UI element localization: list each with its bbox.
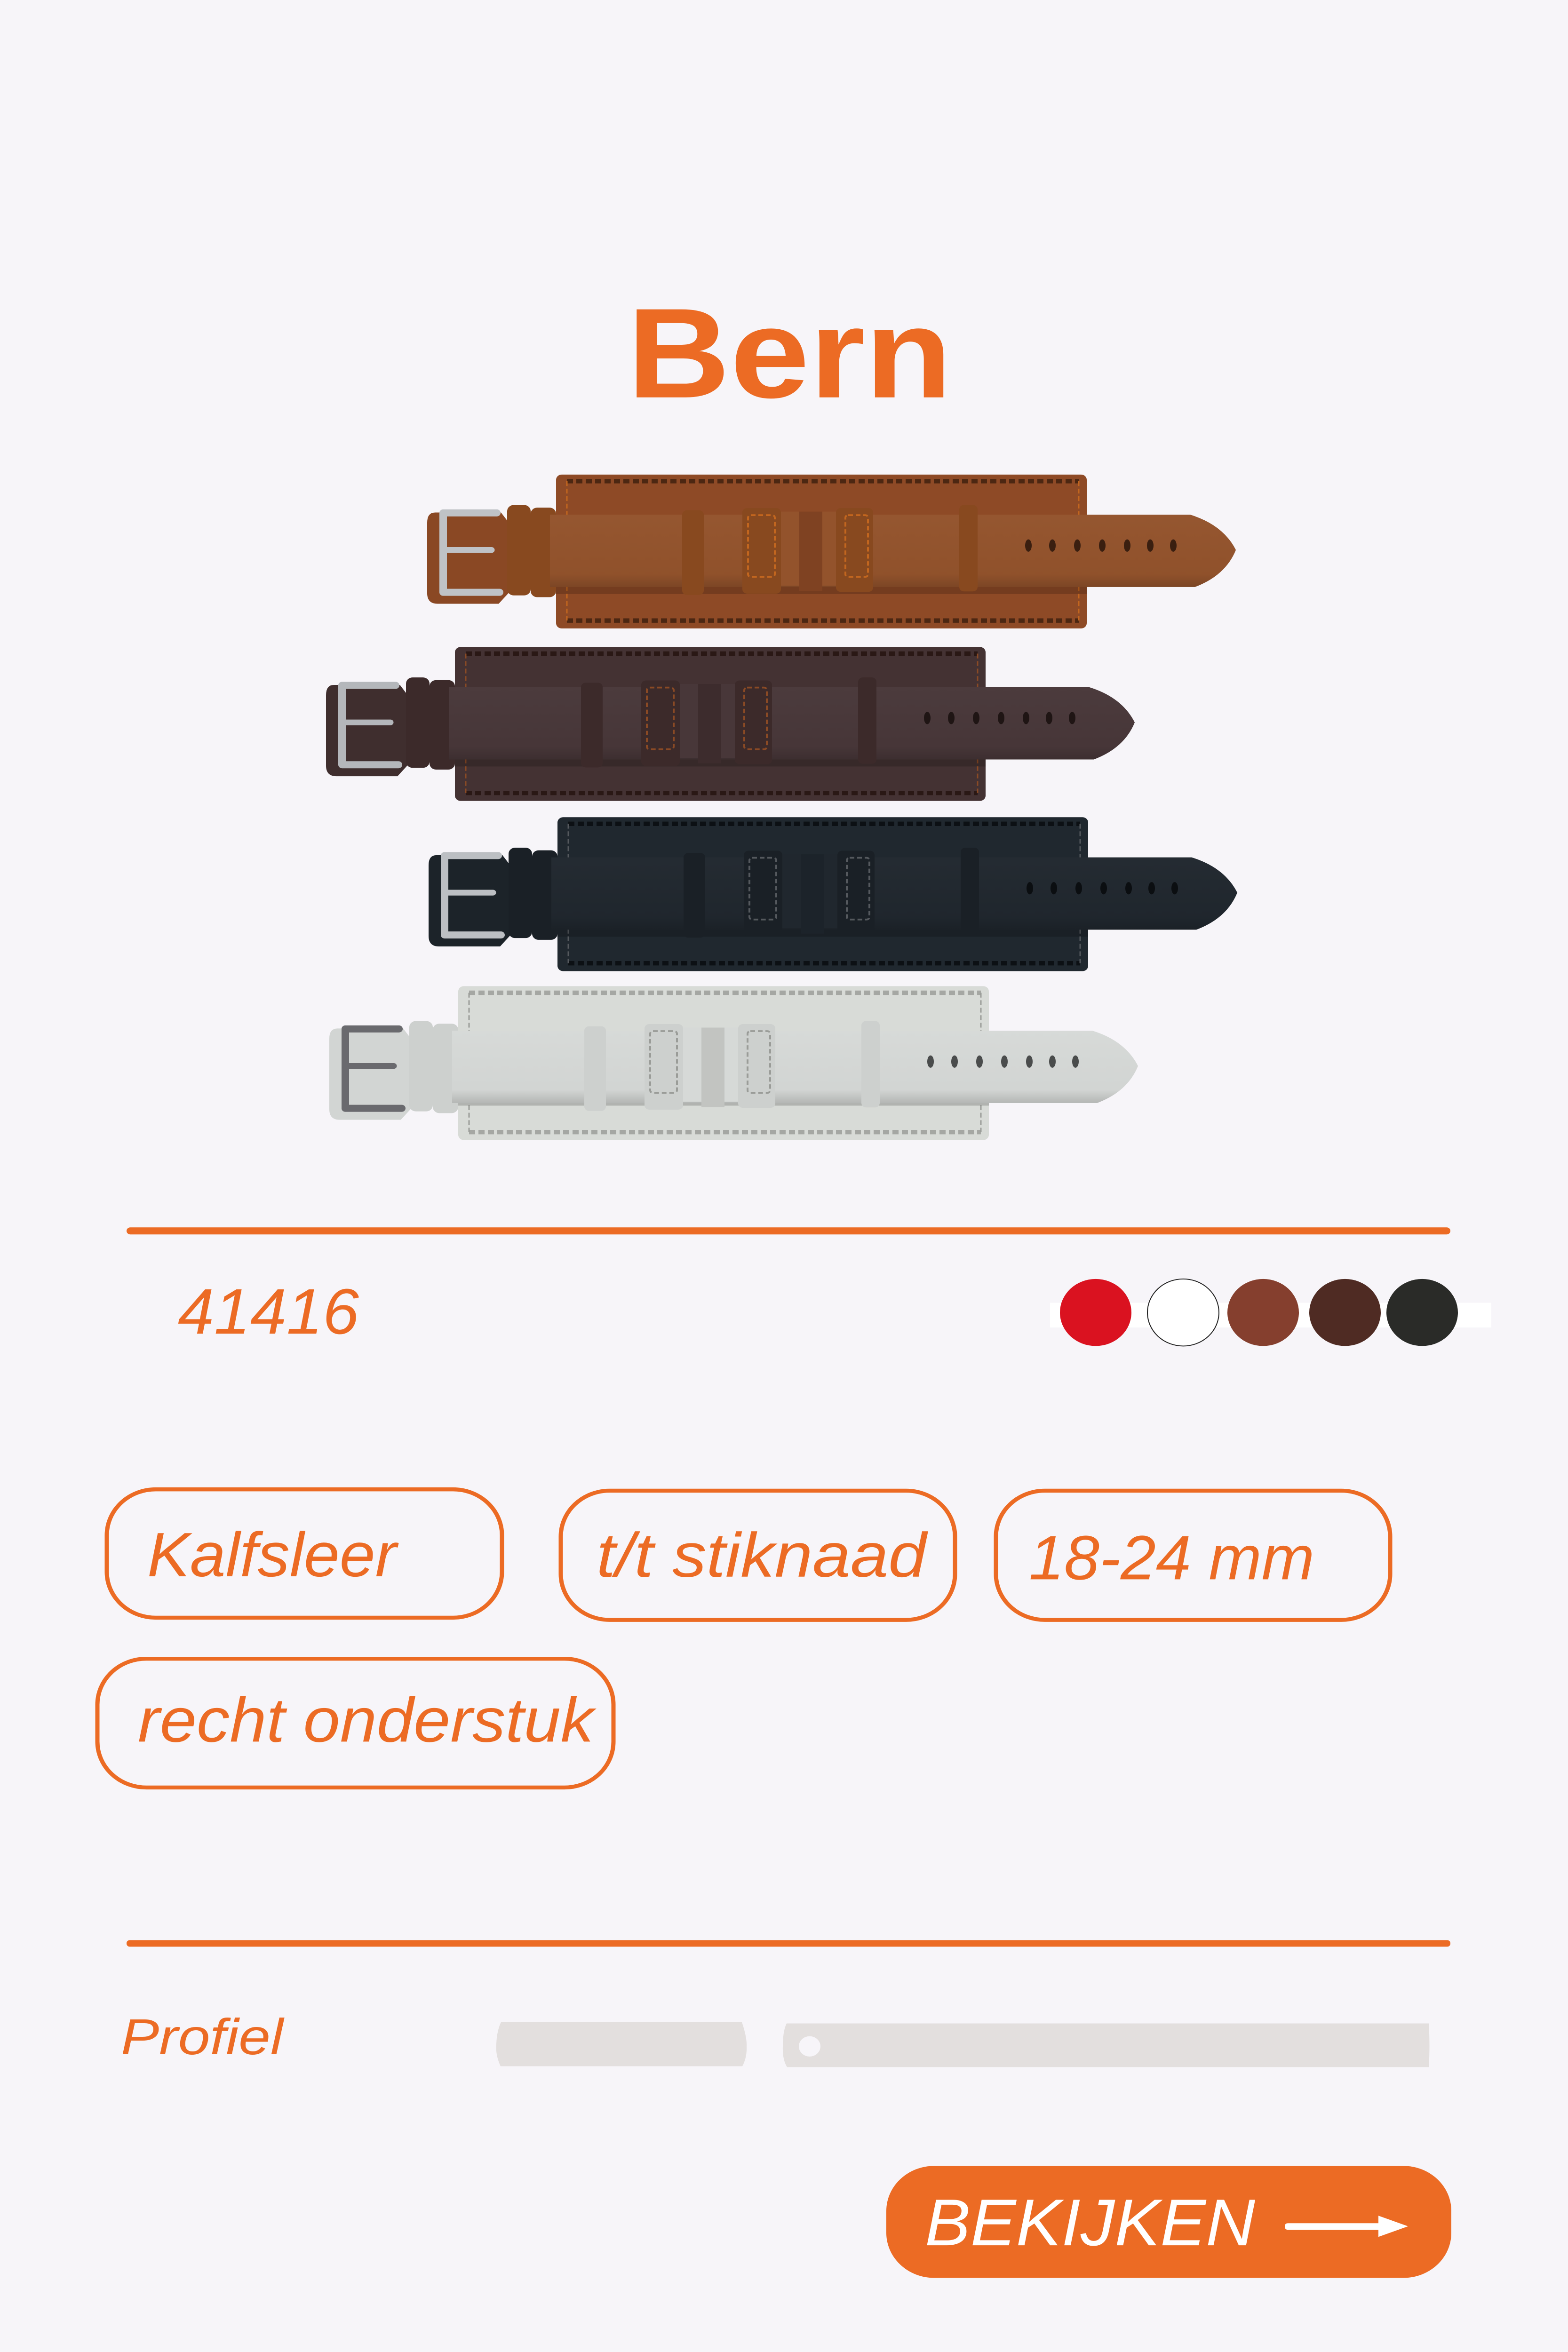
- tag: 18-24 mm: 18-24 mm: [1029, 1523, 1314, 1593]
- icon: arrow: [1285, 2216, 1408, 2237]
- button: BEKIJKEN: [925, 2185, 1256, 2259]
- tag: Kalfsleer: Kalfsleer: [147, 1520, 399, 1590]
- article number: 41416: [178, 1275, 359, 1347]
- profile label: Profiel: [121, 2008, 285, 2065]
- tag: Kalfsleer: [107, 1489, 502, 1618]
- divider: top: [127, 1227, 1450, 1234]
- tag: recht onderstuk: recht onderstuk: [138, 1685, 597, 1755]
- tag: t/t stiknaad: [561, 1491, 955, 1620]
- divider: bottom: [127, 1940, 1450, 1947]
- button: [886, 2166, 1451, 2278]
- strap photo: black: [429, 817, 1237, 971]
- strap photo: dark brown: [326, 647, 1135, 801]
- colour swatches: [1050, 1279, 1491, 1346]
- tag: recht onderstuk: [97, 1659, 613, 1788]
- strap photo: light brown: [427, 475, 1236, 628]
- profile diagram: [496, 2022, 1429, 2067]
- tag: t/t stiknaad: t/t stiknaad: [597, 1520, 929, 1590]
- title: Bern: [627, 282, 952, 425]
- tag: 18-24 mm: [996, 1491, 1390, 1620]
- strap photo: white: [329, 986, 1138, 1140]
